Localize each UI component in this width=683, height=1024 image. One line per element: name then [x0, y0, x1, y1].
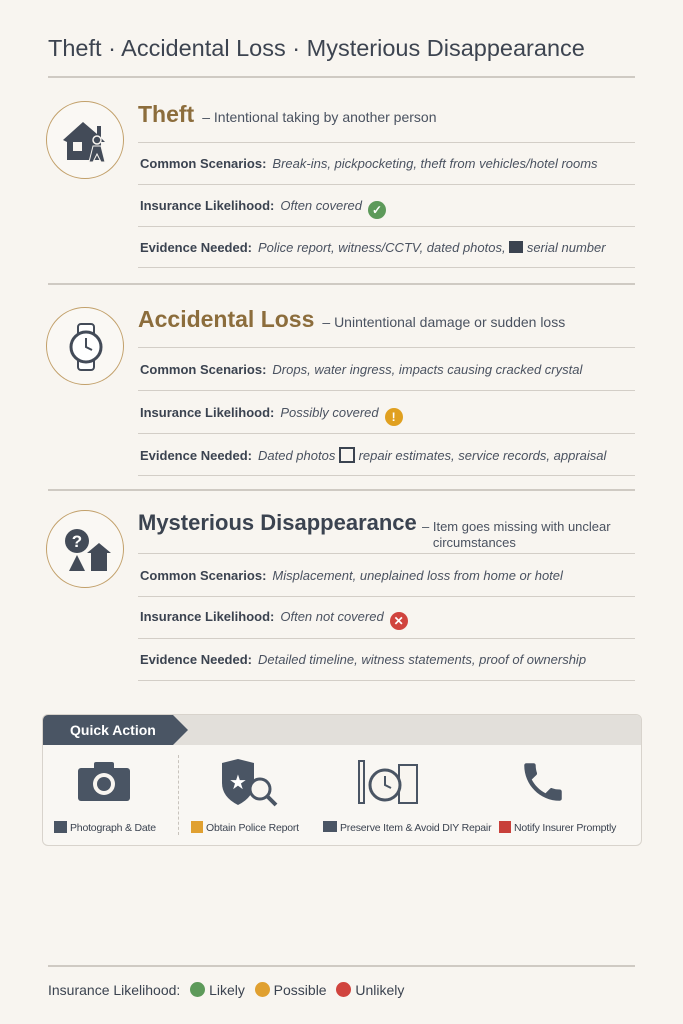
tab heading: Quick Action	[70, 722, 156, 738]
row: scenarios: Common Scenarios: Misplacement, uneplained loss from home or hotel	[140, 568, 563, 583]
row: evidence: Evidence Needed: Detailed timeline, witness statements, proof of ownership	[140, 652, 586, 667]
row: likelihood: ✓	[372, 203, 382, 217]
panel: accidental loss	[46, 306, 635, 476]
row: scenarios: Common Scenarios: Drops, water ingress, impacts causing cracked crystal	[140, 362, 582, 377]
row: likelihood: Insurance Likelihood: Often covered	[140, 198, 362, 213]
row: likelihood	[140, 609, 408, 630]
label: preserve: Preserve Item & Avoid DIY Repair	[340, 822, 491, 834]
panel: quick action	[42, 714, 642, 846]
subtitle	[422, 519, 611, 550]
panel: theft	[46, 101, 635, 268]
row: likelihood	[140, 198, 386, 219]
icon: question house: ?	[72, 532, 82, 551]
row: likelihood	[140, 405, 403, 426]
subtitle: circumstances	[433, 535, 516, 550]
icon: watch	[46, 307, 124, 385]
row: evidence: Evidence Needed: Police report, witness/CCTV, dated photos, serial number	[140, 240, 606, 255]
icon: police badge	[222, 759, 278, 806]
row: likelihood: Insurance Likelihood: Often not covered	[140, 609, 384, 624]
icon: phone	[524, 763, 562, 801]
icon: camera	[78, 762, 130, 801]
row: scenarios: Common Scenarios: Break-ins, pickpocketing, theft from vehicles/hotel rooms	[140, 156, 598, 171]
icon: question house	[46, 510, 124, 588]
row: likelihood: !	[392, 410, 396, 424]
tab heading	[43, 715, 188, 745]
row: likelihood: Insurance Likelihood: Possibly covered	[140, 405, 379, 420]
legend: Insurance Likelihood: Likely Possible Unlikely	[48, 982, 404, 998]
icon: house thief	[46, 101, 124, 179]
row: evidence: Evidence Needed: Dated photos repair estimates, service records, appraisal	[140, 448, 606, 463]
title: Theft · Accidental Loss · Mysterious Disappearance	[48, 35, 585, 61]
row: likelihood: ✕	[394, 614, 404, 628]
label: photograph: Photograph & Date	[70, 822, 156, 834]
subtitle: – Item goes missing with unclear	[422, 519, 611, 534]
label: police: Obtain Police Report	[206, 822, 299, 834]
icon: police badge: ★	[229, 772, 247, 794]
heading: Accidental Loss – Unintentional damage or sudden loss	[138, 306, 565, 332]
panel: mysterious disappearance	[46, 510, 635, 681]
label: notify: Notify Insurer Promptly	[514, 822, 616, 834]
heading: Mysterious Disappearance	[138, 510, 417, 535]
heading: Theft – Intentional taking by another person	[138, 101, 436, 127]
icon: tools clock	[358, 760, 418, 804]
